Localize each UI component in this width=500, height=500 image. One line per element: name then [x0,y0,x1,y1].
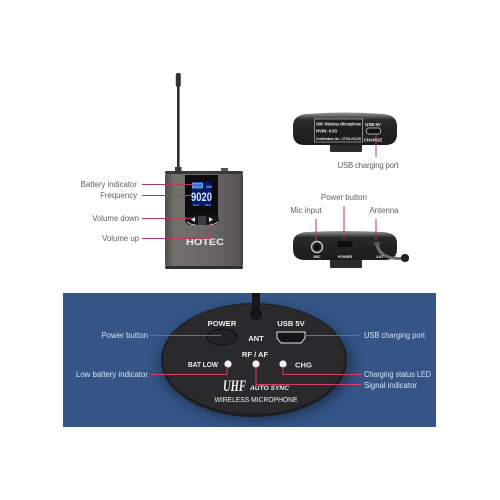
volume buttons [185,215,219,225]
LCD screen [185,175,218,217]
certification label: HVIN: K3S [316,128,337,134]
ANT label: ANT [248,334,264,343]
front view callouts [81,180,211,243]
label: volume up: Volume up [102,234,140,243]
blue panel [63,293,436,427]
device shell [293,231,397,260]
AUTO SYNC: AUTO SYNC [249,385,289,392]
USB port: USB 5V [365,122,381,127]
device shell [293,112,397,145]
label: mic input: Mic input [290,206,322,215]
leader lines [142,184,211,238]
leader lines [150,336,362,384]
USB port [277,319,306,343]
leader lines [316,206,376,241]
device body [165,171,243,269]
device bottom view [293,231,409,268]
power button [207,319,237,345]
USB port: CHARGE [364,138,382,142]
USB charging port callout [338,133,399,170]
label: signal indicator: Signal indicator [364,381,417,390]
label: battery indicator: Battery indicator [81,180,137,189]
oval control plate [159,303,353,421]
mic jack: MIC [314,255,321,259]
label: antenna: Antenna [369,206,399,215]
device top view [293,112,397,152]
RF LED [252,360,260,368]
antenna [175,73,228,173]
certification label: UHF Wireless Microphone [316,122,362,126]
USB port: USB 5V [277,319,306,328]
label: volume down: Volume down [92,214,139,223]
belt clip [330,140,362,152]
label: frequency: Frequency [100,191,137,200]
antenna stub [250,293,262,320]
brand logo: HOTEC [186,237,224,248]
LCD screen: MHz [205,203,212,207]
CHG indicator [279,360,312,370]
certification label: Certification No.: 27701-H1J2S [316,136,361,141]
belt clip [330,256,362,268]
LCD screen: Vol [206,184,212,189]
USB charging port callout: USB charging port [338,161,399,170]
UHF logo: UHF [223,378,246,395]
LCD screen: 9020 [191,192,212,204]
CHG indicator: CHG [295,360,312,370]
bent antenna: ANT [376,255,384,259]
label: charging status LED: Charging status LED [364,370,431,379]
BAT LOW indicator: BAT LOW [188,360,219,369]
WIRELESS MICROPHONE: WIRELESS MICROPHONE [214,395,298,404]
LCD screen: CHA [193,203,199,207]
transmitter front view [165,73,243,269]
RF AF label: RF / AF [242,350,269,359]
certification label [314,119,362,142]
power button: POWER [208,319,237,328]
bottom view callouts [290,193,399,241]
label: power button: Power button [321,193,367,202]
label: power button: Power button [102,331,148,340]
label: USB charging port: USB charging port [364,331,426,340]
USB port [364,122,382,142]
power switch: POWER [338,255,352,259]
label: low battery indicator: Low battery indicator [76,370,148,379]
